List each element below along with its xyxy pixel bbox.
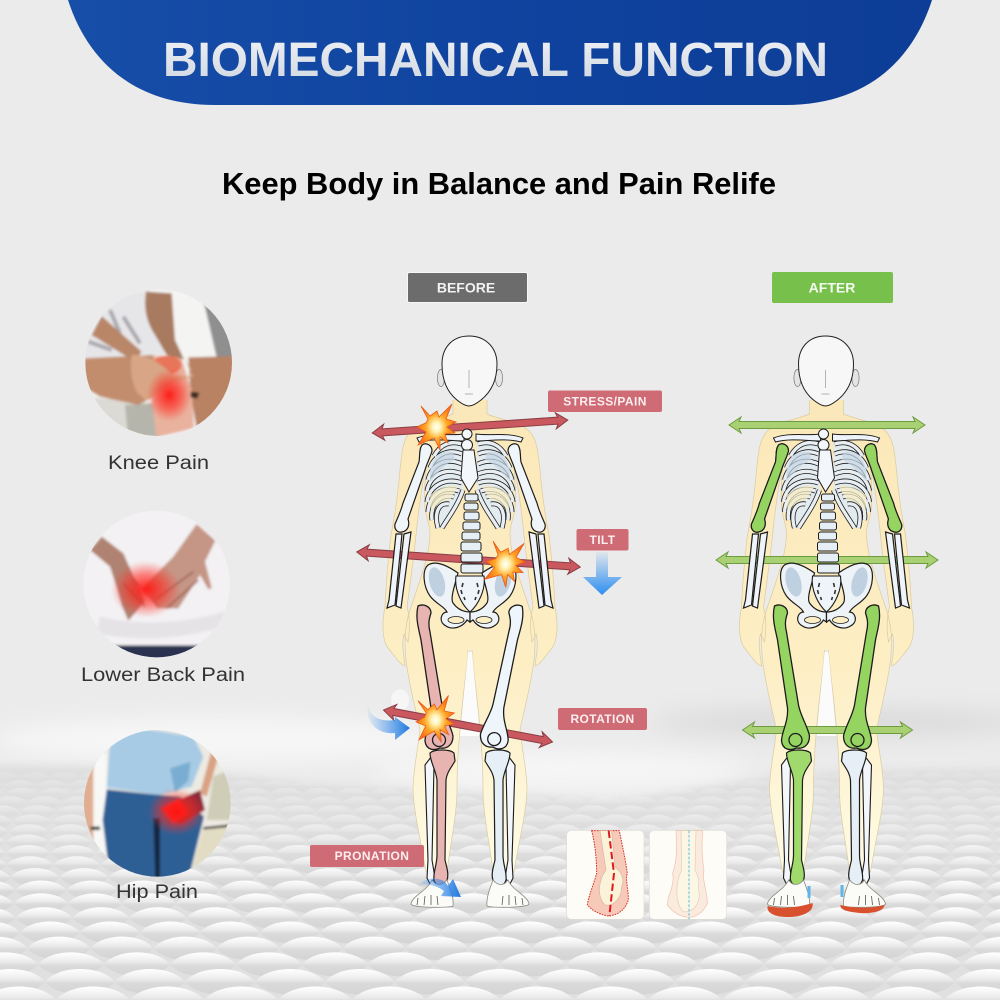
label: lower back pain: Lower Back Pain (81, 665, 245, 686)
inset: foot corrected (649, 830, 727, 919)
label: pronation: PRONATION (335, 849, 409, 863)
label: knee pain: Knee Pain (108, 453, 209, 474)
insole left (767, 903, 813, 917)
quilted mattress surface (0, 760, 1000, 1000)
badge: before (408, 272, 528, 302)
label: hip pain: Hip Pain (116, 882, 198, 903)
photo: knee pain (85, 290, 232, 436)
subtitle: Keep Body in Balance and Pain Relife (222, 166, 776, 201)
label: tilt: TILT (589, 533, 616, 547)
badge: after (772, 272, 893, 303)
photo: lower back pain (91, 524, 216, 658)
label: rotation: ROTATION (570, 712, 635, 726)
label: tilt (576, 529, 628, 550)
badge: before: BEFORE (437, 280, 495, 296)
figure: after skeleton (716, 336, 938, 917)
arrow: tilt down (583, 552, 622, 595)
arrow: knee rotation curve (367, 705, 410, 740)
figure: before skeleton (356, 336, 581, 907)
arrow: shoulder stress (372, 412, 568, 441)
icon: pain burst shoulder (417, 404, 456, 450)
label: stress/pain: STRESS/PAIN (563, 394, 647, 408)
inset: foot pronated (567, 830, 644, 919)
photo: hip pain (84, 730, 231, 877)
insole right (840, 905, 884, 913)
arrow: knee rotation (382, 702, 554, 750)
icon: pain burst hip (483, 539, 528, 590)
skeleton bones (387, 429, 553, 907)
heading: biomechanical function: BIOMECHANICAL FUNCTION (163, 34, 828, 87)
icon: pain burst knee (414, 695, 457, 745)
arrow: knee level (742, 722, 912, 738)
arrow: hip level (716, 552, 938, 568)
arrow: hip tilt (356, 544, 581, 575)
skeleton bones with green alignment (744, 429, 910, 907)
header banner (68, 0, 932, 105)
badge: after: AFTER (809, 280, 855, 296)
arch support right (840, 885, 844, 897)
arrow: foot pronation curve (417, 879, 461, 897)
arch support left (808, 886, 810, 898)
arrow: shoulder level (729, 417, 925, 433)
label: pronation (310, 845, 424, 867)
label: rotation (558, 708, 647, 730)
label: stress/pain (548, 390, 662, 412)
